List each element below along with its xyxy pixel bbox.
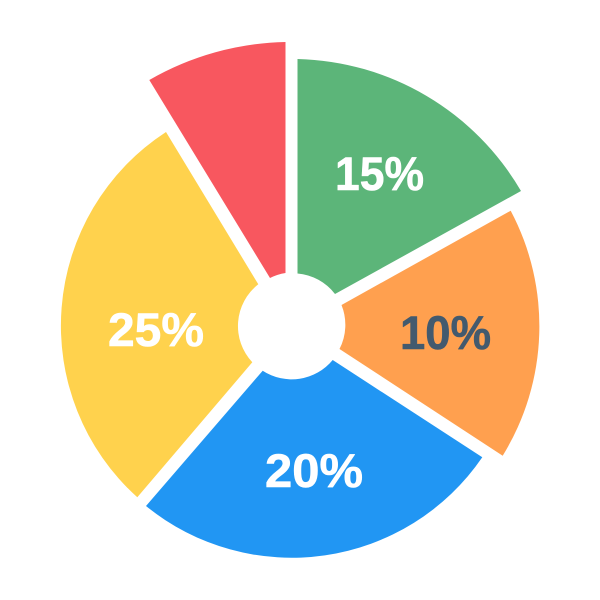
slice: green 15% — [298, 59, 521, 294]
slice: orange 10%: 10% — [400, 306, 491, 359]
slice: blue 20%: 20% — [265, 444, 363, 497]
slice: red exploded — [149, 42, 286, 278]
slice: yellow 25%: 25% — [108, 303, 204, 356]
slice: green 15%: 15% — [335, 147, 424, 200]
slice: orange 10% — [340, 211, 539, 456]
slice: yellow 25% — [61, 132, 258, 497]
slice: blue 20% — [146, 360, 482, 558]
